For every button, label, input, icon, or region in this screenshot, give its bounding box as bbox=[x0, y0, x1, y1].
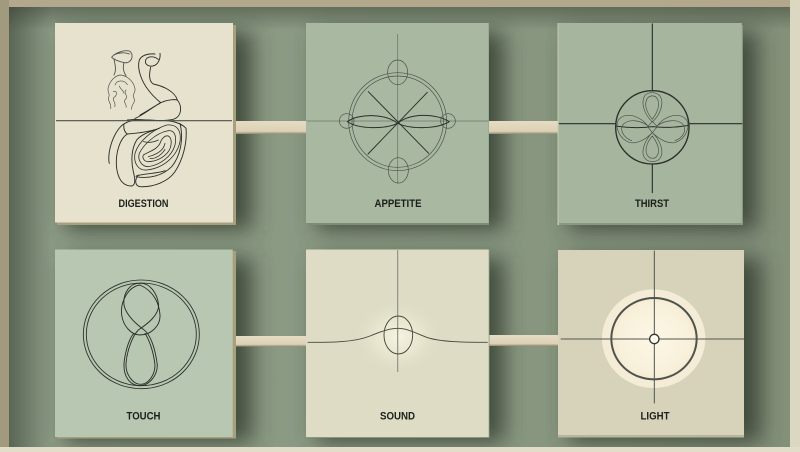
label: light: LIGHT bbox=[640, 410, 670, 422]
icon: appetite wheel bbox=[307, 34, 488, 183]
icon: sound wave bbox=[308, 250, 487, 372]
icon: intestines bbox=[109, 120, 186, 187]
panel: light bbox=[558, 250, 744, 438]
wooden connector pegs bbox=[234, 121, 559, 346]
touch card bbox=[55, 250, 236, 438]
horizontal axis line bbox=[56, 120, 232, 122]
panel: appetite bbox=[306, 23, 489, 225]
light card bbox=[558, 250, 744, 438]
icon: light disc bbox=[561, 251, 744, 403]
panel: digestion bbox=[55, 23, 236, 225]
appetite card bbox=[306, 23, 489, 225]
label: sound: SOUND bbox=[380, 410, 415, 422]
icon: esophagus and stomach bbox=[108, 51, 181, 121]
icon: touch loops bbox=[83, 280, 199, 389]
sound glow bbox=[352, 299, 444, 375]
label: thirst: THIRST bbox=[635, 198, 669, 210]
panel: sound bbox=[306, 250, 490, 438]
label: touch: TOUCH bbox=[126, 410, 161, 422]
panel: touch bbox=[55, 250, 236, 438]
icon: thirst flower bbox=[559, 24, 742, 193]
panel: thirst bbox=[558, 23, 743, 225]
label: appetite: APPETITE bbox=[374, 198, 422, 210]
thirst card bbox=[558, 23, 743, 225]
digestion card bbox=[55, 23, 236, 225]
card shadows bbox=[66, 32, 761, 442]
label: digestion: DIGESTION bbox=[118, 198, 169, 210]
sound card bbox=[306, 250, 490, 438]
